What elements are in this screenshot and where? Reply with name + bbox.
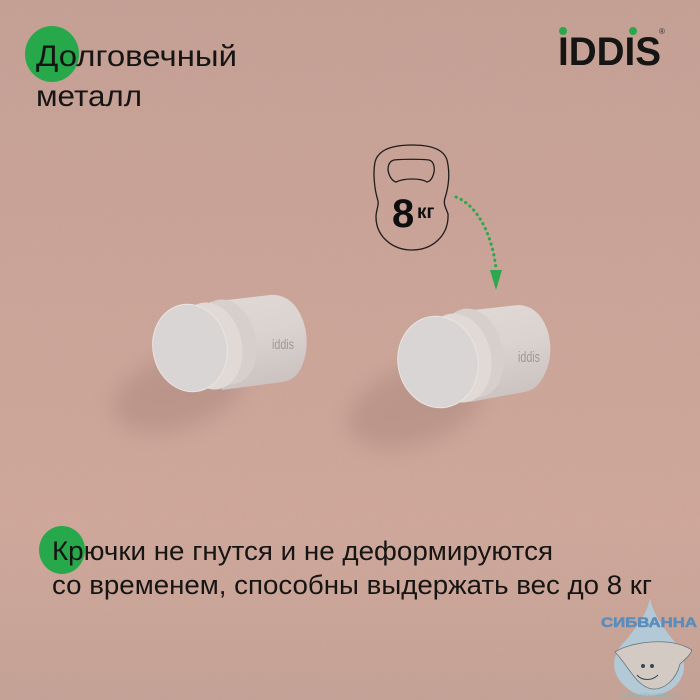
hook engraved logo: iddis (272, 336, 294, 352)
hook engraved logo: iddis (518, 349, 540, 366)
logo dots (559, 27, 637, 35)
caption text: со временем, способны выдержать вес до 8 кг (52, 570, 652, 600)
green highlight circle (25, 26, 79, 82)
hook: right (337, 303, 550, 464)
logo: IDDIS (558, 27, 665, 74)
green highlight circle (39, 526, 85, 574)
caption: load capacity (39, 526, 652, 600)
arrow head (490, 270, 502, 290)
hook neck (416, 307, 500, 409)
arrow: load direction (456, 197, 502, 290)
heading text: металл (36, 80, 142, 113)
hook back cylinder (210, 295, 307, 390)
hook shadow (337, 348, 493, 464)
bathtub (615, 642, 692, 689)
caption text: Крючки не гнутся и не деформируются (52, 536, 553, 566)
hook front disc (389, 309, 487, 415)
registered mark: ® (659, 27, 665, 36)
hook groove (432, 303, 512, 403)
kettlebell outline (374, 145, 449, 250)
hook front disc (145, 297, 235, 399)
bathtub face (637, 664, 658, 680)
hook shadow (102, 337, 254, 447)
hook back cylinder (455, 305, 550, 402)
hook groove (188, 294, 264, 390)
dotted arrow line (456, 197, 496, 268)
weight label: 8 (392, 192, 414, 236)
website address: www.sibvanna.ru (620, 693, 679, 699)
logo wordmark: IDDIS (558, 30, 661, 74)
kettlebell handle opening (388, 159, 434, 182)
hook: left (102, 294, 307, 447)
water drop (614, 598, 684, 696)
watermark: Sibvanna (601, 598, 697, 699)
heading text: Долговечный (36, 40, 237, 73)
hook neck (170, 296, 250, 396)
weight label: кг (417, 202, 435, 223)
heading: durable metal (25, 26, 237, 113)
brand name: СИБВАННА (601, 614, 697, 630)
icon: kettlebell 8 kg (374, 145, 449, 250)
